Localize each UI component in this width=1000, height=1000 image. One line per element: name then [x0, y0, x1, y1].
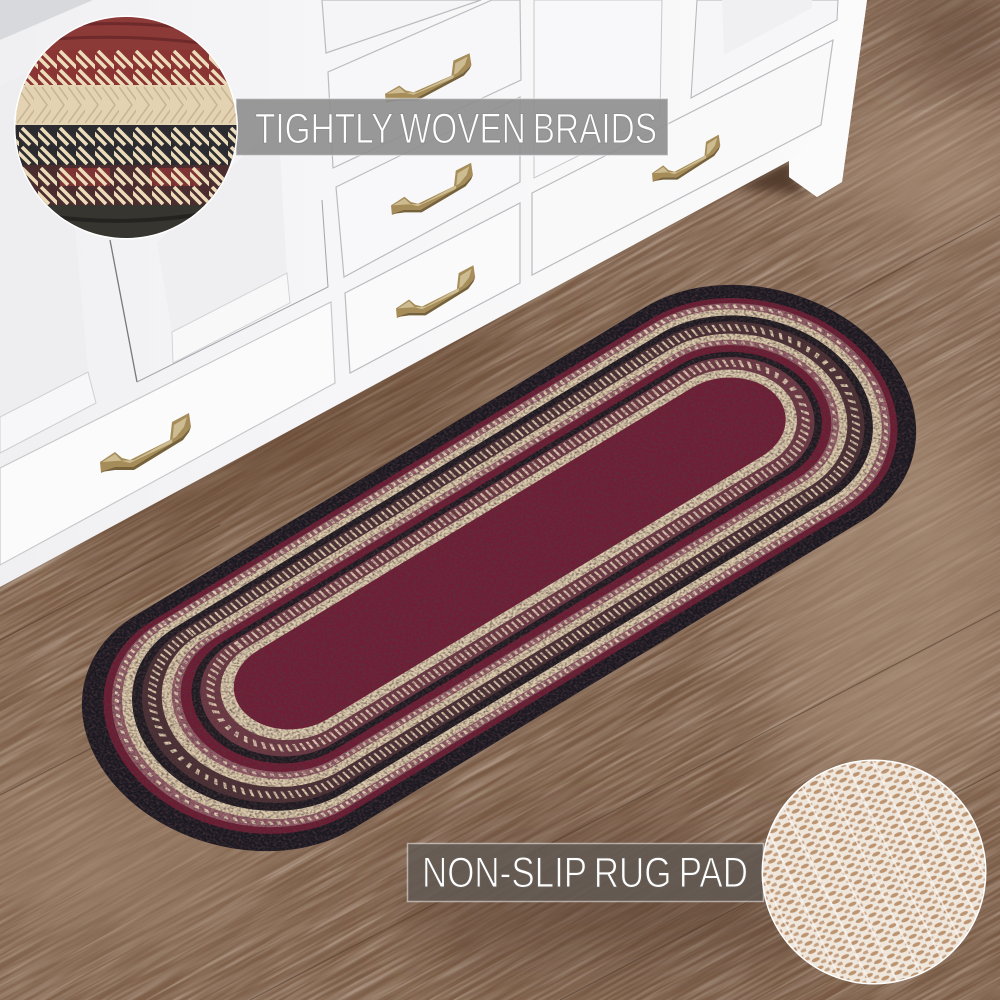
maroon herringbone ring two	[131, 308, 880, 810]
top centre drawer	[322, 0, 481, 53]
inner maroon herringbone ring	[167, 332, 848, 782]
dark herringbone ring	[92, 284, 914, 841]
second door recessed panel	[157, 120, 287, 332]
second door frame line	[137, 200, 328, 382]
label text: NON-SLIP RUG PAD	[422, 849, 748, 897]
right large drawer	[532, 40, 833, 275]
door gap line	[110, 240, 137, 382]
label bar	[236, 98, 668, 156]
label bar	[408, 844, 764, 902]
handle: fourth drawer	[396, 265, 475, 318]
fourth centre drawer	[345, 203, 520, 373]
herringbone detail: middle band	[136, 312, 875, 806]
cabinet leg	[789, 0, 867, 197]
second centre drawer	[328, 0, 521, 168]
callout: non-slip rug pad	[408, 760, 986, 984]
floor plank seams	[0, 215, 1000, 1000]
handle: lower left drawer	[100, 413, 191, 473]
label text: TIGHTLY WOVEN BRAIDS	[255, 105, 657, 153]
callout: tightly woven braids	[10, 10, 668, 241]
lower left drawer	[0, 302, 335, 565]
black ring	[79, 276, 926, 851]
maroon and cream herringbone ring	[53, 259, 949, 871]
braid close-up circle	[10, 10, 242, 241]
braided oval rug	[15, 235, 983, 901]
handle: third drawer	[391, 163, 473, 215]
herringbone detail: dark band	[105, 292, 903, 831]
black ring two	[156, 325, 858, 791]
left cabinet door	[0, 60, 88, 417]
maroon ring	[43, 252, 958, 880]
rug pad close-up circle	[762, 760, 986, 984]
white cabinet	[0, 0, 867, 587]
cream ring	[66, 267, 937, 861]
third centre drawer	[336, 97, 520, 277]
left door bottom lip	[0, 372, 96, 453]
right door inner panel	[722, 0, 812, 55]
handle: right drawer	[652, 135, 720, 182]
herringbone detail: inner band	[180, 340, 836, 771]
centre maroon field	[210, 359, 809, 748]
centre door	[534, 0, 662, 178]
braid texture overlay	[15, 235, 983, 901]
handle: second drawer	[385, 53, 471, 103]
outer black braid	[15, 235, 983, 901]
marble countertop	[0, 0, 93, 40]
right door	[691, 0, 838, 98]
herringbone detail: outer band	[60, 263, 943, 866]
second door lip	[172, 273, 290, 363]
cabinet shadow on floor	[735, 160, 805, 194]
maroon ring two	[142, 316, 870, 801]
cream ring two	[118, 300, 891, 820]
inner cream ring	[193, 348, 824, 761]
